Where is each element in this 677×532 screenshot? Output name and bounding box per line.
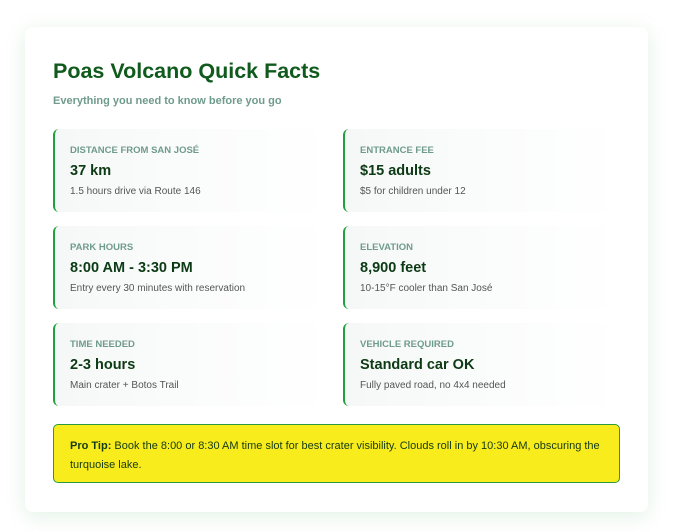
panel: distance: [53, 129, 330, 212]
panel: time needed: Main crater + Botos Trail: [70, 380, 179, 391]
panel: elevation: [343, 226, 620, 309]
panel: entrance fee: [343, 129, 620, 212]
panel: entrance fee: $15 adults: [360, 163, 431, 179]
panel: elevation: ELEVATION: [360, 242, 413, 253]
panel: park hours: [53, 226, 330, 309]
panel: entrance fee: ENTRANCE FEE: [360, 145, 434, 156]
title: Poas Volcano Quick Facts: [53, 59, 320, 83]
panel: distance: 1.5 hours drive via Route 146: [70, 186, 201, 197]
panel: distance: DISTANCE FROM SAN JOSÉ: [70, 145, 199, 156]
panel: distance: 37 km: [70, 163, 111, 179]
panel: elevation: 8,900 feet: [360, 260, 426, 276]
subtitle: Everything you need to know before you go: [53, 95, 282, 107]
panel: time needed: [53, 323, 330, 406]
panel: vehicle: VEHICLE REQUIRED: [360, 339, 454, 350]
callout: pro tip: [53, 424, 620, 483]
panel: entrance fee: $5 for children under 12: [360, 186, 466, 197]
panel: vehicle: [343, 323, 620, 406]
panel: vehicle: Standard car OK: [360, 357, 474, 373]
panel: park hours: PARK HOURS: [70, 242, 133, 253]
panel: time needed: 2-3 hours: [70, 357, 135, 373]
panel: park hours: 8:00 AM - 3:30 PM: [70, 260, 193, 276]
panel: vehicle: Fully paved road, no 4x4 needed: [360, 380, 506, 391]
panel: elevation: 10-15°F cooler than San José: [360, 283, 492, 294]
callout: pro tip: Pro Tip: Book the 8:00 or 8:30 AM time slot for best crater visibility. Clouds roll in by 10:30 AM, obscuring the turquoise lake.: [70, 440, 600, 471]
panel: park hours: Entry every 30 minutes with reservation: [70, 283, 245, 294]
panel: time needed: TIME NEEDED: [70, 339, 135, 350]
